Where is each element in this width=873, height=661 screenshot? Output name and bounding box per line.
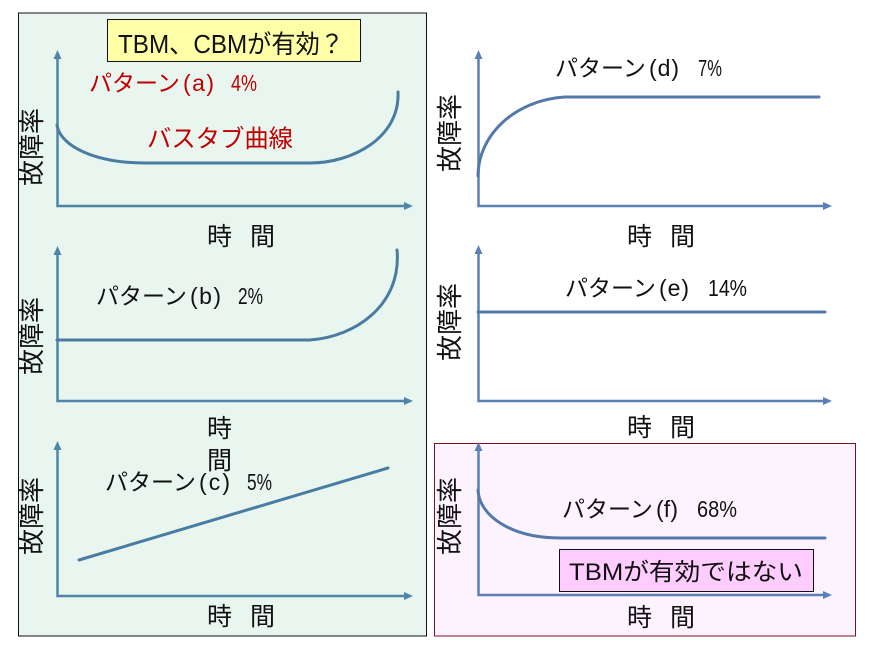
label: pattern b share: (b) bbox=[190, 283, 221, 309]
label: pattern a share bbox=[89, 70, 257, 96]
label: pattern c share: パターン bbox=[105, 469, 196, 495]
axis label: failure rate: 故障率 bbox=[435, 283, 465, 361]
panel: TBM and CBM effective patterns bbox=[17, 13, 426, 636]
label: pattern a share: (a) bbox=[183, 70, 214, 96]
axis label: time (wrapped): 時 bbox=[207, 415, 232, 443]
label: pattern f share: パターン bbox=[562, 496, 653, 522]
label: pattern c share bbox=[105, 469, 272, 495]
axis label: failure rate: 故障率 bbox=[435, 94, 465, 172]
label: pattern e share: (e) bbox=[659, 275, 689, 301]
label: pattern e share: 14% bbox=[708, 275, 747, 301]
chart: pattern d bbox=[435, 50, 832, 251]
axis label: failure rate: 故障率 bbox=[17, 297, 47, 375]
axis label: time: 時 bbox=[627, 223, 652, 251]
axis label: time: 間 bbox=[250, 603, 275, 631]
label: pattern d share: 7% bbox=[698, 55, 722, 81]
callout: TBM not effective: TBMが有効ではない bbox=[569, 559, 803, 586]
chart: pattern c bbox=[17, 441, 413, 631]
label: pattern c share: 5% bbox=[247, 469, 272, 495]
axis label: time: 時 bbox=[207, 603, 232, 631]
callout: TBM not effective bbox=[560, 550, 814, 592]
label: pattern e share: パターン bbox=[565, 275, 656, 301]
axis label: time bbox=[207, 603, 275, 631]
label: pattern d share bbox=[555, 55, 722, 81]
panel: TBM not effective pattern f bbox=[434, 442, 856, 636]
axis label: failure rate: 故障率 bbox=[17, 108, 47, 186]
callout: TBM and CBM effective? bbox=[108, 20, 360, 62]
callout: TBM and CBM effective?: TBM、CBMが有効？ bbox=[118, 31, 344, 59]
label: pattern a share: 4% bbox=[231, 70, 257, 96]
axis label: time bbox=[627, 223, 695, 251]
axis label: time (wrapped) bbox=[207, 415, 232, 475]
label: pattern d share: (d) bbox=[649, 55, 679, 81]
chart: pattern f bbox=[435, 442, 832, 632]
axis label: failure rate: 故障率 bbox=[435, 477, 465, 555]
axis label: time: 間 bbox=[670, 414, 695, 442]
axis label: time bbox=[207, 223, 275, 251]
label: pattern d share: パターン bbox=[555, 55, 646, 81]
chart: pattern e bbox=[435, 245, 832, 442]
label: pattern a share: パターン bbox=[89, 70, 180, 96]
axis label: time: 間 bbox=[250, 223, 275, 251]
chart: pattern a bathtub curve bbox=[17, 50, 413, 251]
axis label: time bbox=[627, 414, 695, 442]
label: bathtub curve: バスタブ曲線 bbox=[147, 125, 293, 153]
chart: pattern b bbox=[17, 246, 413, 475]
axis label: time (wrapped): 間 bbox=[207, 447, 232, 475]
label: pattern f share bbox=[562, 496, 737, 522]
axis label: time: 時 bbox=[627, 604, 652, 632]
axis label: time: 間 bbox=[670, 604, 695, 632]
axis label: time: 時 bbox=[207, 223, 232, 251]
label: pattern b share bbox=[96, 283, 263, 309]
label: pattern e share bbox=[565, 275, 747, 301]
label: pattern b share: パターン bbox=[96, 283, 187, 309]
axis label: failure rate: 故障率 bbox=[17, 477, 47, 555]
label: pattern f share: (f) bbox=[656, 496, 678, 522]
label: pattern f share: 68% bbox=[697, 496, 737, 522]
label: pattern c share: (c) bbox=[199, 469, 230, 495]
label: pattern b share: 2% bbox=[238, 283, 263, 309]
axis label: time: 間 bbox=[670, 223, 695, 251]
axis label: time bbox=[627, 604, 695, 632]
axis label: time: 時 bbox=[627, 414, 652, 442]
